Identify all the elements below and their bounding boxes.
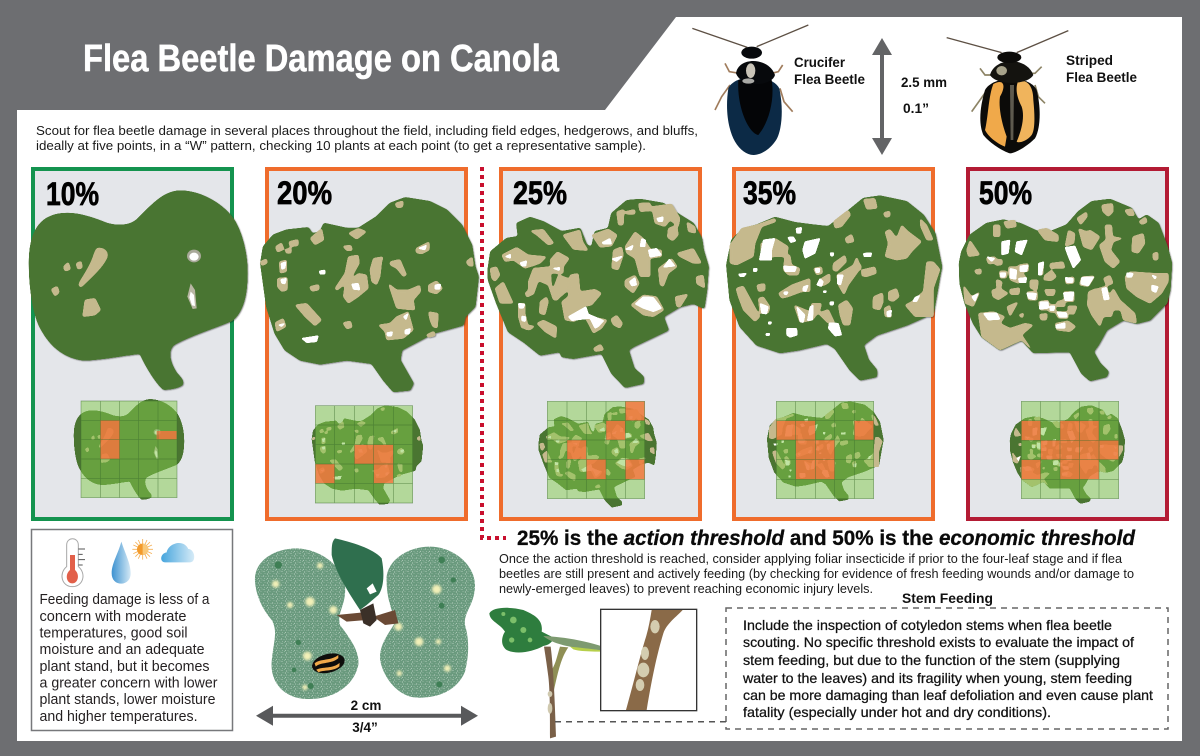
stem feeding text: can be more damaging than leaf defoliation and even cause plant — [743, 687, 1153, 703]
stem feeding text: fatality (especially under hot and dry conditions). — [743, 704, 1051, 720]
weather text: plant stands, lower moisture — [40, 691, 216, 708]
arrow: body length — [872, 38, 892, 155]
threshold text — [499, 551, 1134, 596]
label: seedling width — [351, 698, 381, 735]
grid: 35% — [767, 401, 883, 501]
leaf: 10% — [29, 191, 247, 389]
stem feeding panel — [726, 608, 1168, 729]
stem feeding text: Include the inspection of cotyledon stems when flea beetle — [743, 617, 1112, 633]
intro text: Scout for flea beetle damage in several places throughout the field, including field edges, hedgerows, and bluffs, — [36, 123, 698, 138]
threshold heading: 25% is the action threshold and 50% is the economic threshold — [517, 527, 1136, 550]
leaf: 50% — [959, 199, 1172, 381]
intro text: ideally at five points, in a “W” pattern, checking 10 plants at each point (to get a representative sample). — [36, 138, 646, 153]
stem feeding heading: Stem Feeding — [902, 591, 993, 606]
beetles and size scale — [692, 25, 1137, 155]
arrow: seedling width — [256, 706, 478, 726]
beetle: crucifer flea beetle — [692, 25, 808, 155]
label: striped flea beetle: Striped — [1066, 53, 1113, 68]
label: crucifer flea beetle — [794, 55, 865, 87]
threshold text: beetles are still present and actively feeding (by checking for evidence of fresh feeding wounds and/or damage to — [499, 566, 1134, 581]
weather text — [40, 591, 218, 725]
photo: seedling stem — [489, 608, 617, 738]
feeding pits — [275, 557, 456, 689]
weather text: and higher temperatures. — [40, 708, 198, 725]
grid: 50% — [1010, 401, 1125, 503]
label: crucifer flea beetle: Crucifer — [794, 55, 846, 70]
weather text: a greater concern with lower — [40, 674, 218, 692]
threshold text: Once the action threshold is reached, consider applying foliar insecticide if prior to the four-leaf stage and if flea — [499, 551, 1123, 566]
label: seedling width: 2 cm — [351, 698, 381, 713]
beetle: striped flea beetle — [947, 31, 1068, 153]
label: seedling width: 3/4” — [352, 720, 378, 735]
label: crucifer flea beetle: Flea Beetle — [794, 72, 865, 87]
icon: water drop — [112, 542, 131, 584]
panel: 20% damage — [260, 169, 478, 519]
icon: sun — [132, 539, 153, 560]
threshold text: newly-emerged leaves) to prevent reaching economic injury levels. — [499, 581, 873, 596]
percent label: 25% — [513, 175, 567, 211]
left cotyledon — [255, 548, 359, 699]
percent label: 20% — [277, 175, 332, 211]
icon: thermometer — [62, 539, 85, 587]
damage spots — [272, 563, 451, 690]
leaf: 20% — [260, 198, 478, 392]
label: size: 0.1” — [903, 101, 929, 116]
threshold marker: dotted red line — [482, 167, 506, 538]
grid: 10% — [74, 399, 184, 499]
weather text: concern with moderate — [40, 608, 186, 625]
panel: 25% damage — [488, 169, 708, 519]
leaf: 35% — [727, 196, 942, 380]
panel: 10% damage — [29, 169, 247, 519]
weather text: temperatures, good soil — [40, 624, 188, 642]
stem feeding text: water to the leaves) and its fragility when young, stem feeding — [742, 670, 1132, 686]
weather text: Feeding damage is less of a — [40, 591, 210, 608]
weather text: plant stand, but it becomes — [40, 658, 210, 675]
stem feeding text: scouting. No specific threshold exists to evaluate the impact of — [743, 634, 1134, 650]
label: size: 2.5 mm — [901, 75, 947, 90]
percent label: 10% — [46, 176, 99, 212]
label: striped flea beetle — [1066, 53, 1137, 85]
grid: 20% — [312, 406, 423, 504]
weather text: moisture and an adequate — [40, 641, 204, 658]
panel: 50% damage — [959, 169, 1172, 519]
grid: 25% — [539, 401, 656, 507]
stem feeding text: stem feeding, but due to the function of the stem (supplying — [743, 652, 1120, 668]
connector: stem to panel — [555, 721, 726, 723]
label: striped flea beetle: Flea Beetle — [1066, 70, 1137, 85]
intro text — [36, 123, 698, 153]
striped beetle on leaf — [310, 650, 347, 676]
stem feeding text — [742, 617, 1153, 720]
stems — [337, 610, 398, 625]
panel: 35% damage — [727, 169, 942, 519]
leaf: 25% — [488, 199, 708, 387]
inset: stem close-up — [601, 609, 697, 711]
percent label: 50% — [979, 175, 1032, 211]
percent label: 35% — [743, 175, 796, 211]
label: size — [901, 75, 947, 116]
centre leaf — [332, 538, 383, 610]
icon: cloud — [161, 543, 194, 562]
title: Flea Beetle Damage on Canola — [83, 38, 560, 80]
panel: weather conditions — [32, 530, 232, 730]
photo: cotyledon seedling with beetle — [255, 538, 475, 699]
right cotyledon — [380, 547, 475, 698]
